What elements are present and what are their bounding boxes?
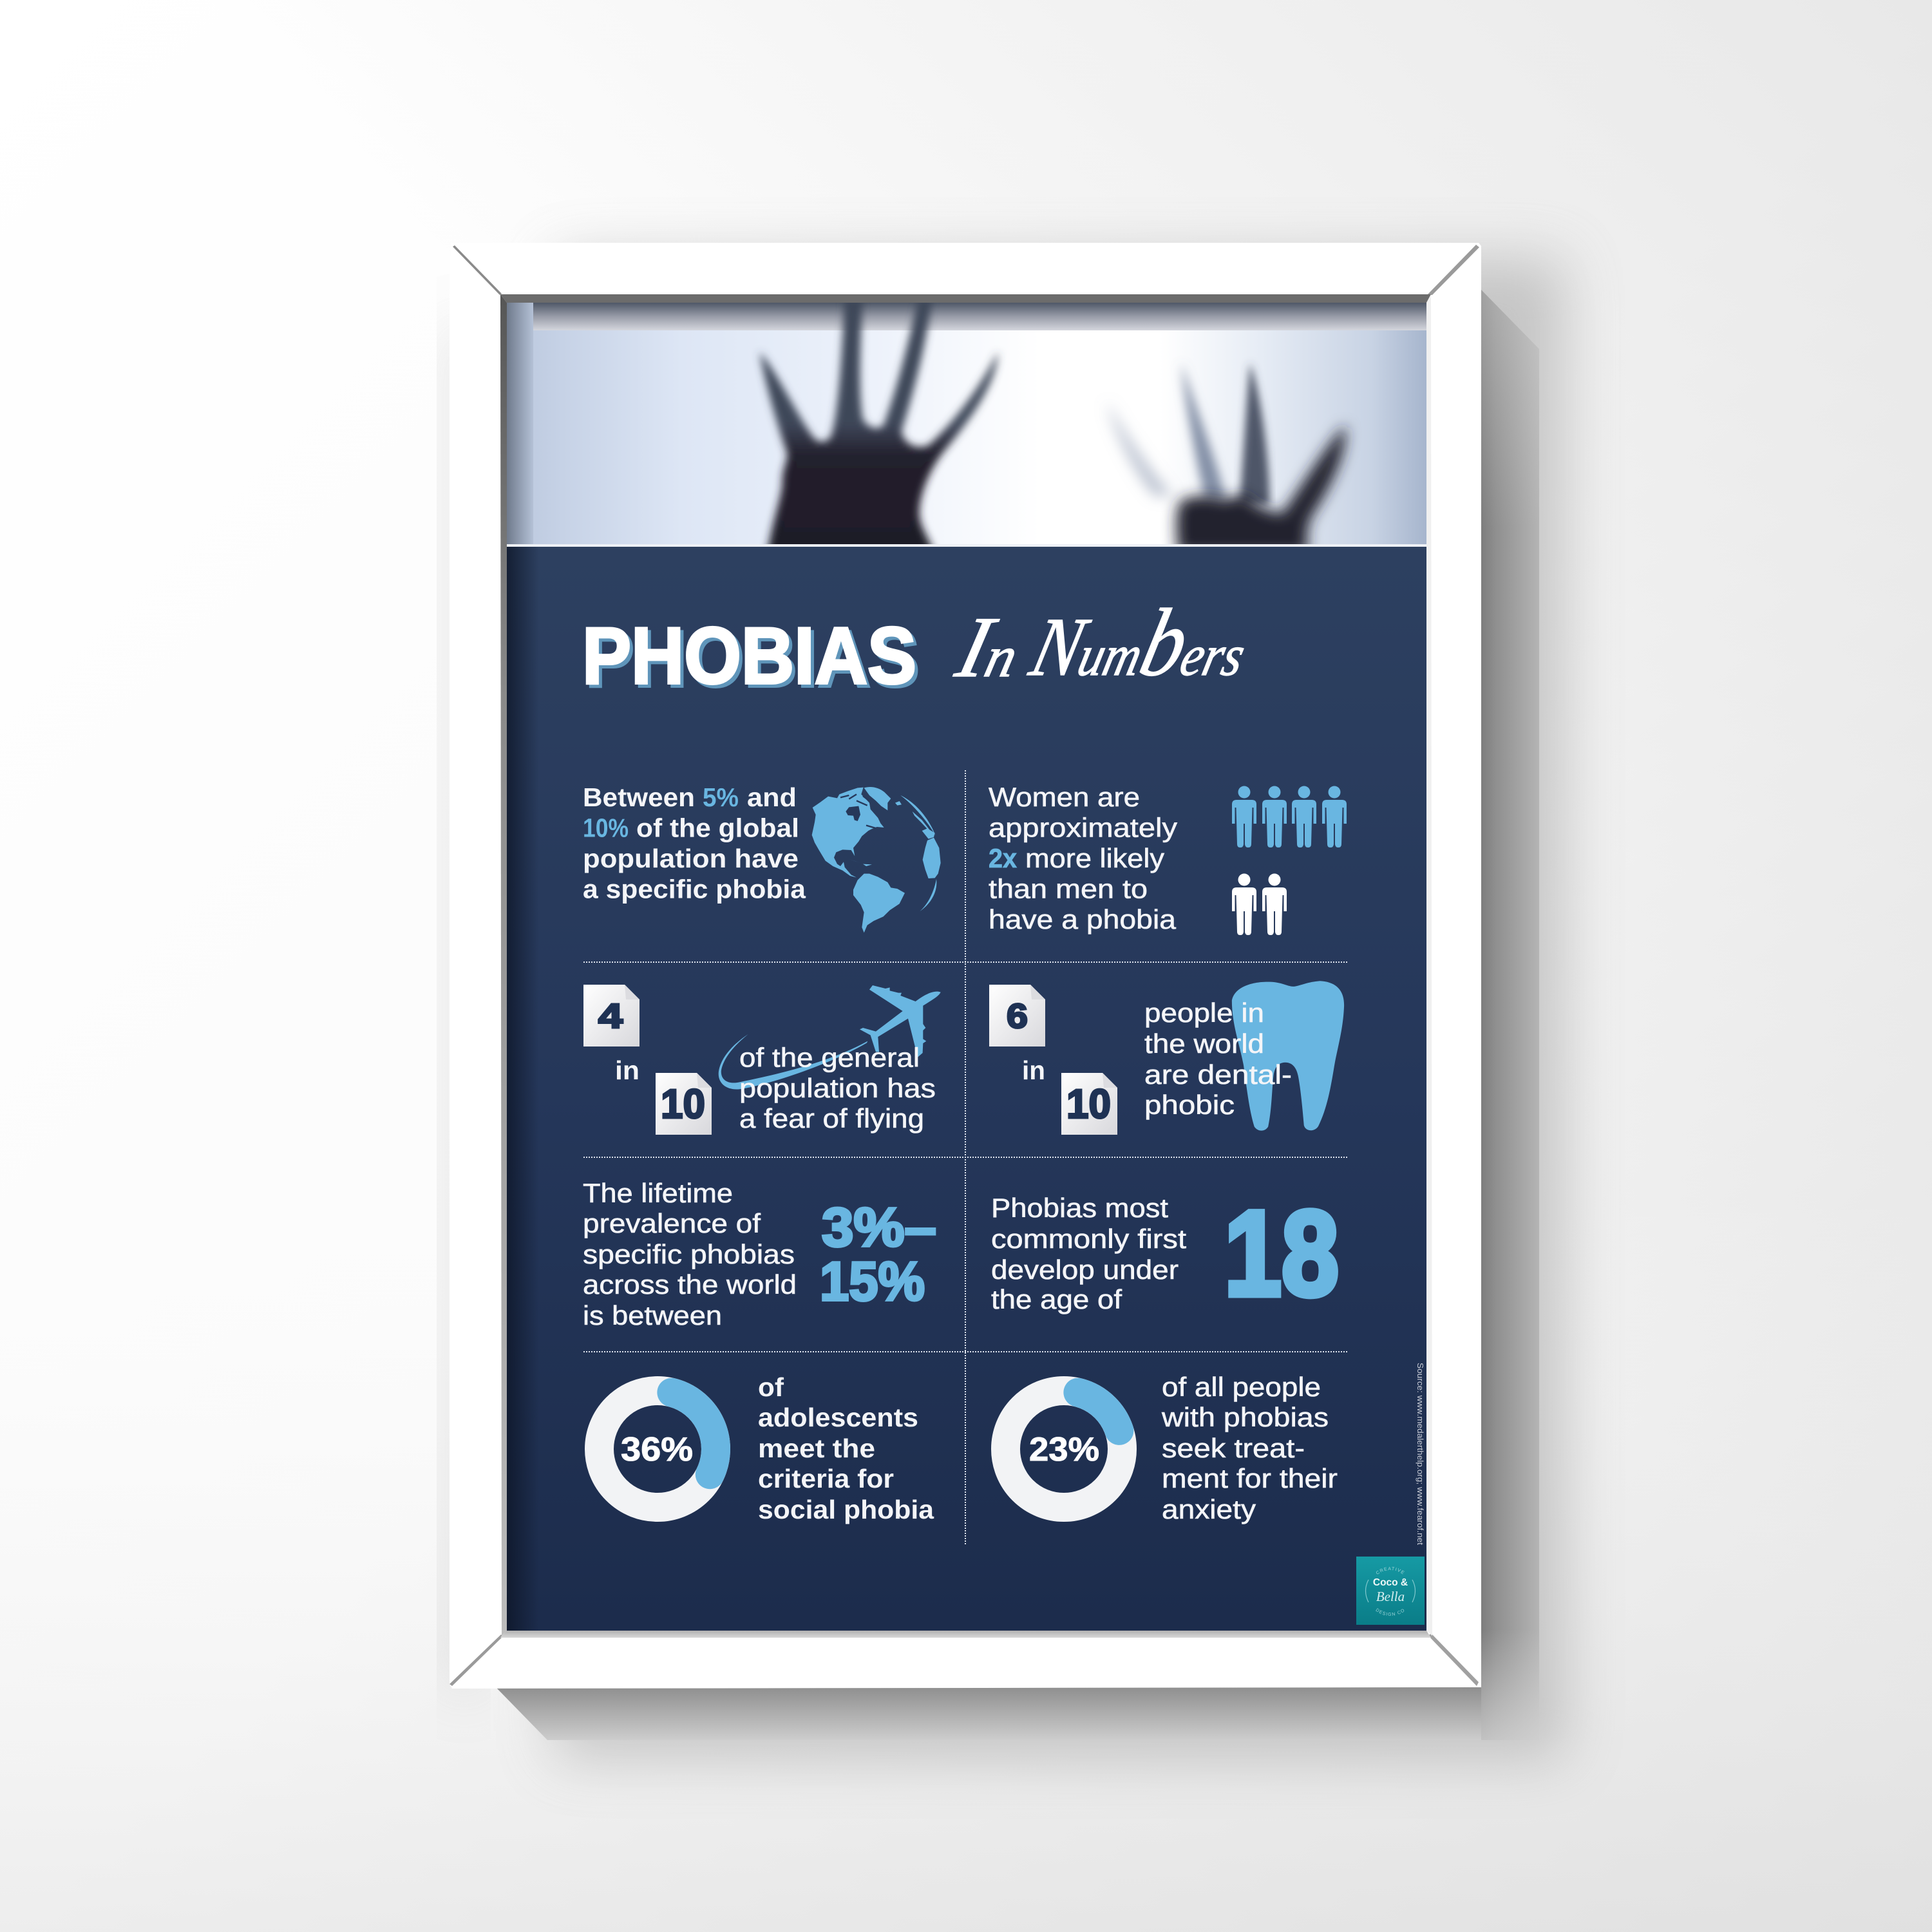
heading: PHOBIAS: PHOBIAS — [582, 612, 916, 701]
icon: left hand silhouette — [760, 294, 998, 554]
logo: Coco and Bella — [1356, 1557, 1425, 1625]
logo: Coco and Bella: CREATIVE — [1376, 1567, 1405, 1574]
text: phobias first develop: develop under — [991, 1255, 1179, 1285]
panel: seek treatment donut — [1006, 1372, 1338, 1524]
chart: donut 23%: 23% — [1029, 1431, 1099, 1468]
text: seek treatment: anxiety — [1162, 1494, 1256, 1524]
frame drop shadow — [496, 290, 1539, 1740]
text: adolescents: criteria for — [758, 1464, 894, 1493]
icon: tooth — [1232, 981, 1344, 1131]
panel: age of onset — [991, 1186, 1339, 1321]
icon: number card 4 — [583, 985, 639, 1046]
text: phobias first develop — [991, 1193, 1186, 1314]
panel: dental phobia — [989, 981, 1344, 1135]
text: adolescents — [758, 1372, 934, 1524]
panel: women versus men — [989, 782, 1347, 935]
text: adolescents: of — [758, 1372, 784, 1402]
text: between 5% and 10%: 10% — [583, 813, 629, 842]
logo: Coco and Bella: Coco & — [1373, 1577, 1408, 1588]
icon: four women — [1232, 786, 1347, 848]
text: lifetime prevalence description: The lifetime — [583, 1178, 733, 1208]
text: dental phobic: are dental- — [1144, 1059, 1292, 1090]
source credit: Source: www.medalerthelp.org; www.fearof.net — [1416, 1363, 1425, 1545]
text: adolescents: adolescents — [758, 1403, 918, 1432]
text: women 2x more likely: approximately — [989, 813, 1177, 842]
text: phobias first develop: commonly first — [991, 1224, 1186, 1254]
text: fear of flying: a fear of flying — [739, 1103, 924, 1133]
text: between 5% and 10%: a specific phobia — [583, 875, 806, 904]
text: fear of flying: of the general — [739, 1042, 920, 1073]
text: women 2x more likely: more likely — [1025, 843, 1164, 873]
stat: 18: 18 — [1224, 1186, 1339, 1321]
chart: donut 36%: 36% — [621, 1431, 693, 1468]
text: fear of flying — [739, 1042, 936, 1133]
icon: right hand silhouette — [1107, 363, 1345, 554]
text: lifetime prevalence description: is between — [583, 1300, 722, 1331]
icon: number card 10: 10 — [661, 1081, 705, 1127]
logo: Coco and Bella: Bella — [1376, 1589, 1405, 1604]
text: women 2x more likely: 2x — [989, 843, 1018, 873]
text: between 5% and 10%: Between — [583, 782, 695, 812]
heading: In Numbers script: In — [948, 599, 1030, 696]
text: between 5% and 10%: population have — [583, 844, 799, 873]
text: adolescents: meet the — [758, 1434, 875, 1463]
text: phobias first develop: Phobias most — [991, 1193, 1168, 1223]
icon: number card 6: 6 — [1007, 997, 1028, 1036]
heading: In Numbers script: Numbers — [1021, 589, 1260, 696]
text: seek treatment — [1161, 1372, 1338, 1524]
heading: PHOBIAS: PHOBIAS — [585, 615, 920, 704]
panel: global prevalence — [583, 782, 941, 933]
stat: 3% to 15%: 3%– — [822, 1197, 936, 1258]
icon: number card 4: 4 — [598, 997, 623, 1036]
text: women 2x more likely: Women are — [989, 782, 1140, 812]
text: fear of flying: population has — [739, 1073, 936, 1103]
chart: donut 36% — [599, 1391, 716, 1507]
text: seek treatment: seek treat- — [1162, 1433, 1305, 1463]
icon: number card 10 — [656, 1073, 712, 1135]
text: seek treatment: with phobias — [1161, 1402, 1329, 1432]
text: between 5% and 10% — [583, 782, 806, 904]
chart: donut 23% — [1006, 1391, 1122, 1507]
text: dental phobic — [1144, 998, 1292, 1120]
icon: number card 10: 10 — [1066, 1081, 1111, 1127]
icon: number card 6 — [989, 985, 1045, 1046]
frame inner lips — [500, 294, 1432, 1638]
text: dental phobic: people in — [1144, 998, 1264, 1028]
text: lifetime prevalence description: prevalence of — [583, 1208, 761, 1238]
text: women 2x more likely: than men to — [989, 873, 1148, 904]
white picture frame — [450, 243, 1481, 1689]
panel: adolescents donut — [599, 1372, 934, 1524]
text: dental phobic: the world — [1144, 1028, 1264, 1059]
text: lifetime prevalence description — [583, 1178, 797, 1331]
logo: Coco and Bella: DESIGN CO — [1376, 1608, 1404, 1616]
text: dental phobic: phobic — [1144, 1090, 1235, 1120]
photo: hands behind frosted glass — [507, 294, 1426, 554]
panel: fear of flying — [583, 985, 941, 1135]
text: lifetime prevalence description: specific phobias — [583, 1239, 795, 1269]
text: adolescents: social phobia — [758, 1495, 934, 1524]
grid dividers — [583, 770, 1347, 1545]
text: between 5% and 10%: and — [747, 782, 797, 812]
text: between 5% and 10%: of the global — [636, 813, 799, 842]
text: women 2x more likely — [989, 782, 1177, 934]
text: in: in — [1022, 1056, 1045, 1085]
icon: airplane with swoosh — [719, 985, 941, 1090]
text: between 5% and 10%: 5% — [703, 782, 739, 812]
text: in: in — [615, 1056, 639, 1085]
poster navy panel — [507, 545, 1426, 1631]
icon: two men — [1232, 873, 1287, 935]
stat: 3% to 15%: 15% — [820, 1251, 925, 1312]
icon: globe — [812, 787, 941, 933]
panel: lifetime prevalence — [583, 1178, 936, 1331]
icon: number card 10 — [1061, 1073, 1117, 1135]
stat: 3% to 15% — [820, 1197, 936, 1312]
text: seek treatment: ment for their — [1162, 1463, 1338, 1493]
text: seek treatment: of all people — [1162, 1372, 1321, 1402]
text: lifetime prevalence description: across the world — [583, 1269, 797, 1300]
text: phobias first develop: the age of — [991, 1284, 1122, 1314]
text: women 2x more likely: have a phobia — [989, 904, 1177, 934]
title — [582, 589, 1260, 704]
